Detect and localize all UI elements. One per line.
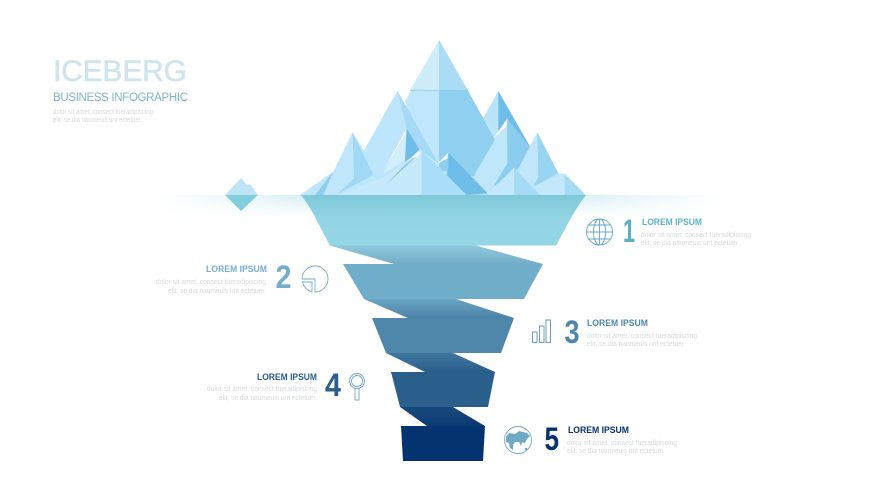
- number 4: 4: [325, 367, 341, 403]
- right back peak: [483, 91, 530, 147]
- text 4: elit, se dia naumeuis unt ectetuer.: [219, 395, 317, 402]
- text 5: dolor sit amet, consect tueradipiscing: [567, 440, 677, 447]
- text 3: [587, 333, 697, 348]
- title: ICEBERG: [53, 55, 187, 88]
- connector 2: [364, 299, 514, 318]
- number 2: 2: [276, 259, 292, 295]
- left middle peak: [338, 91, 438, 195]
- text 2: [156, 279, 266, 295]
- far right peak: [519, 132, 558, 187]
- number 1: 1: [623, 213, 635, 249]
- front centre ridge: [338, 150, 488, 195]
- band 1: [301, 195, 586, 246]
- text 4: dolor sit amet, consect tueradipiscing: [207, 386, 317, 393]
- band 3: [372, 318, 514, 353]
- band 5: [401, 426, 485, 461]
- heading 5: LOREM IPSUM: [568, 425, 629, 436]
- small iceberg: [225, 178, 258, 211]
- right front peak: [474, 118, 530, 188]
- icon: globe grid: [586, 219, 612, 245]
- icon: bar chart: [532, 320, 550, 342]
- text 5: [567, 440, 677, 455]
- text 1: [641, 232, 751, 247]
- intro text: dolor sit amet, consect tueradipiscing: [53, 109, 153, 116]
- item 5: [504, 421, 677, 457]
- water horizon: [155, 195, 727, 217]
- heading 4: LOREM IPSUM: [257, 372, 317, 383]
- connector 3: [386, 353, 495, 372]
- text 5: elit, se dia naumeuis unt ectetuer.: [567, 448, 665, 455]
- heading 2: LOREM IPSUM: [206, 264, 267, 275]
- text 2: dolor sit amet, consect tueradipiscing: [156, 279, 266, 286]
- text 4: [207, 386, 317, 402]
- item 1: [586, 213, 751, 249]
- number 5: 5: [544, 421, 559, 457]
- band 2: [343, 264, 543, 299]
- heading 1: LOREM IPSUM: [642, 217, 702, 228]
- connector 1: [330, 246, 543, 264]
- icon: pie chart: [302, 266, 328, 292]
- item 3: [532, 314, 697, 350]
- text 2: elit, se dia naumeuis unt ectetuer.: [168, 288, 266, 295]
- subtitle: BUSINESS INFOGRAPHIC: [53, 92, 188, 104]
- text 3: elit, se dia naumeuis unt ectetuer: [587, 341, 685, 348]
- band 4: [391, 372, 495, 407]
- connector 4: [400, 407, 485, 426]
- intro text: [53, 109, 153, 124]
- item 4: [207, 367, 364, 403]
- number 3: 3: [564, 314, 580, 350]
- intro text: elit, se dia naumeuis unt ectetuer.: [53, 117, 142, 124]
- main peak: [405, 40, 495, 177]
- text 1: elit, se dia naumeuis unt ectetuer: [641, 240, 739, 247]
- funnel below water: [301, 195, 586, 461]
- text 1: dolor sit amet, consect tueradipiscing: [641, 232, 751, 239]
- far left peak: [300, 132, 373, 195]
- text 3: dolor sit amet, consect tueradipiscing: [587, 333, 697, 340]
- iceberg base fill: [300, 40, 586, 195]
- heading 3: LOREM IPSUM: [587, 318, 648, 329]
- item 2: [156, 259, 328, 295]
- iceberg above water: [300, 40, 586, 195]
- icon: magnifier: [350, 374, 364, 400]
- icon: world map globe: [504, 426, 532, 454]
- front right ridges: [487, 168, 586, 195]
